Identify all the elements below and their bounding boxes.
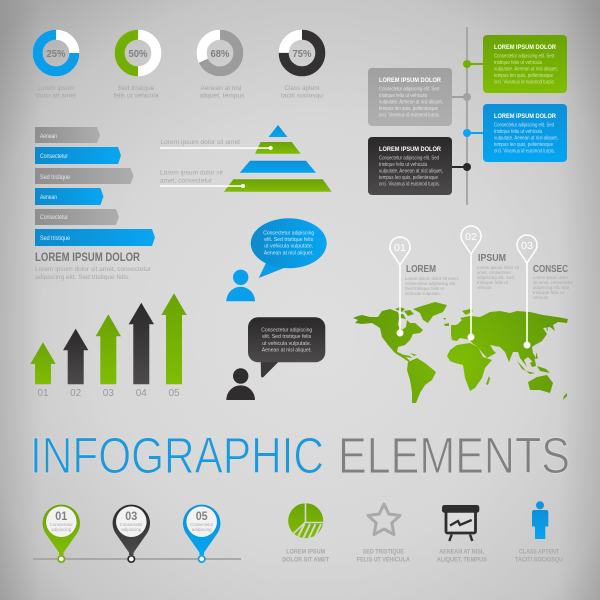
location pin 05: 05 [196, 511, 208, 523]
bubble: blue: elit. Sed tristique felis [264, 237, 314, 243]
icon: pie chart [282, 502, 329, 564]
icon: presentation board: AENEAN AT NISL [439, 548, 484, 556]
pyramid callout: lower [160, 170, 245, 188]
icon: blue person [226, 270, 255, 301]
donut: 75%: 75% [292, 49, 312, 60]
arrow 02: 02 [70, 388, 82, 399]
donut: 50%: 50% [128, 49, 148, 60]
map text: ipsum: tristique felis ut [477, 280, 509, 286]
map text: consec: sit amet, consectetur [533, 280, 573, 286]
location pin 05: adipiscing [192, 527, 212, 532]
map text: ipsum: amet, consectetur [477, 270, 511, 276]
map text: consec: adipiscing elit. Sed [533, 285, 569, 291]
donut: 68%: Aenean at nisl [200, 85, 242, 92]
title [30, 427, 570, 484]
arrow 03: 03 [103, 388, 114, 399]
location pin 01: 01 [55, 511, 68, 523]
icon: person: CLASS APTENT [519, 548, 559, 556]
timeline box: gray: Consectetur adipiscing elit. Sed [379, 86, 439, 92]
donut: 50% [114, 35, 159, 100]
icon: presentation board [437, 505, 487, 564]
title: INFOGRAPHIC [30, 427, 324, 484]
donut: 25%: Lorem ipsum [38, 85, 74, 92]
location pin 01: Consectetur [50, 522, 73, 527]
timeline box: gray: tempus leo quis, pellentesque [379, 106, 438, 112]
donut: 50%: felis ut vehicula [114, 92, 159, 100]
timeline box: dark: Consectetur adipiscing elit. Sed [379, 156, 439, 162]
icon: star: FELIS UT VEHICULA [357, 556, 410, 564]
timeline box: blue [463, 104, 567, 162]
pin 03: 03 [521, 241, 533, 252]
timeline box: green: orci. Vivamus id euismod turpis. [494, 80, 555, 86]
pin 02 [461, 226, 481, 340]
timeline box: blue: LOREM IPSUM DOLOR [494, 113, 556, 120]
timeline box: dark: LOREM IPSUM DOLOR [379, 146, 441, 153]
timeline box: blue: tempus leo quis, pellentesque [494, 142, 553, 148]
timeline box: green: vulputate. Aenean at nisl aliquet, [494, 66, 558, 72]
timeline box: green: tristique felis ut vehicula [494, 60, 542, 66]
world map [353, 302, 568, 403]
map text: consec: vehicula [533, 295, 548, 301]
map text: lorem: consectetur adipiscing elit. [405, 281, 456, 287]
pyramid callout: lower: amet, consectetur [160, 178, 213, 184]
map text: consec: tristique felis ut [533, 290, 565, 296]
tab: Sed tristique: Sed tristique [40, 236, 71, 242]
timeline box: gray: orci. Vivamus id euismod turpis. [379, 112, 440, 118]
map text: ipsum: IPSUM [478, 253, 506, 264]
arrow 03 [96, 314, 121, 399]
bubble: blue: Consectetur adipiscing [263, 230, 314, 236]
pin 02: 02 [465, 232, 477, 243]
icon: pie chart: DOLOR SIT AMET [282, 556, 329, 564]
location pin 05: Consectetur [190, 522, 214, 527]
dark speech bubble with person [226, 317, 325, 400]
arrow 01 [30, 342, 56, 399]
icon: person [515, 501, 563, 564]
location pin 03: adipiscing [121, 527, 142, 532]
map text: consec: CONSEC [533, 264, 568, 275]
map text: ipsum: vehicula [477, 285, 491, 291]
arrow 05: 05 [168, 388, 180, 399]
donut charts row [36, 35, 323, 100]
pin 03 [517, 235, 537, 348]
bubble: dark: ut vehicula vulputate. [262, 341, 311, 347]
timeline box: gray: vulputate. Aenean at nisl aliquet, [379, 100, 443, 106]
arrow 05 [161, 293, 187, 399]
pyramid callout: upper [160, 139, 273, 150]
timeline box: dark: tristique felis ut vehicula [379, 162, 427, 168]
timeline box: dark: vulputate. Aenean at nisl aliquet, [379, 168, 443, 174]
location pin 05 [183, 505, 220, 562]
map text: ipsum: adipiscing elit. Sed [477, 275, 514, 281]
location pin 03: 03 [125, 511, 137, 523]
map text: ipsum [477, 253, 520, 291]
timeline box: blue: vulputate. Aenean at nisl aliquet, [494, 136, 558, 142]
timeline box: blue: tristique felis ut vehicula [494, 129, 542, 135]
arrow 02 [63, 329, 88, 399]
donut: 25% [36, 35, 76, 100]
text block: lorem ipsum dolor: Lorem ipsum dolor sit amet, consectetur [35, 266, 152, 273]
map text: lorem: LOREM [406, 264, 436, 275]
bubble: dark: elit. Sed tristique felis [262, 334, 312, 340]
map pins [390, 226, 573, 348]
tab bars list [35, 127, 155, 246]
location pin 03: Consectetur [120, 522, 143, 527]
icon: star [357, 504, 410, 564]
timeline box: dark: orci. Vivamus id euismod turpis. [379, 182, 440, 188]
icon: dark person [226, 368, 255, 400]
text block: lorem ipsum dolor: adipiscing elit. Sed tristique felis. [35, 274, 130, 281]
pyramid chart [160, 125, 332, 192]
icon: presentation board: ALIQUET, TEMPUS [437, 556, 487, 564]
bubble: dark: Consectetur adipiscing [261, 328, 312, 334]
bubble: blue [251, 218, 327, 278]
tab: Aenean: Aenean [40, 195, 57, 201]
location pin 03 [113, 505, 150, 562]
text block: lorem ipsum dolor: LOREM IPSUM DOLOR [35, 252, 141, 264]
bubble: blue: Aenean at nisl aliquet. [264, 250, 314, 256]
map text: consec [533, 264, 573, 301]
donut: 68% [200, 35, 245, 100]
tab: Consectetur: Consectetur [40, 215, 68, 221]
donut: 25%: 25% [46, 49, 66, 60]
map text: lorem: Sed tristique felis ut [405, 286, 445, 292]
timeline box: green: Consectetur adipiscing elit. Sed [494, 54, 554, 60]
blue speech bubble with person [226, 218, 327, 301]
pin 01 [390, 237, 410, 336]
bubble: blue: ut vehicula vulputate. [264, 244, 313, 250]
location pins timeline [33, 505, 241, 562]
arrow bar chart [30, 293, 187, 399]
timeline box: gray: LOREM IPSUM DOLOR [379, 77, 441, 84]
timeline box: green: tempus leo quis, pellentesque [494, 73, 553, 79]
arrow 04: 04 [136, 388, 147, 399]
timeline box: dark [368, 137, 471, 195]
map text: lorem: vehicula vulputate. [405, 291, 441, 297]
donut: 75% [281, 35, 323, 100]
donut: 50%: Sed tristique [118, 85, 155, 92]
donut: 68%: 68% [210, 49, 230, 60]
timeline with text boxes [368, 27, 567, 205]
bottom icons row [282, 501, 563, 564]
pyramid callout: upper: Lorem ipsum dolor sit amet [160, 139, 240, 146]
bubble: dark: Aenean at nisl aliquet. [262, 348, 312, 354]
tab: Sed tristique: Sed tristique [40, 175, 71, 181]
pin 01: 01 [394, 243, 406, 254]
timeline box: green [463, 35, 567, 93]
location pin 01: adipiscing [51, 527, 72, 532]
map text: lorem: Lorem ipsum dolor sit amet, [405, 276, 459, 282]
location pin 01 [43, 505, 80, 562]
pyramid callout: lower: Lorem ipsum dolor sit [160, 170, 223, 177]
map text: ipsum: Lorem ipsum dolor sit [477, 265, 520, 271]
icon: star: SED TRISTIQUE [363, 548, 404, 556]
icon: pie chart: LOREM IPSUM [286, 548, 325, 556]
donut: 75%: taciti sociosqu [281, 92, 323, 100]
icon: person: TACITI SOCIOSQU [515, 556, 563, 564]
bubble: dark [248, 317, 325, 378]
map text: lorem [405, 264, 459, 297]
donut: 68%: aliquet, tempus [200, 92, 245, 100]
donut: 75%: Class aptent [284, 85, 320, 92]
map text: consec: Lorem ipsum dolor [533, 275, 568, 281]
arrow 01: 01 [37, 388, 49, 399]
arrow 04 [129, 303, 154, 399]
text block: lorem ipsum dolor [35, 252, 152, 281]
donut: 25%: dolor sit amet [36, 92, 76, 100]
timeline box: blue: orci. Vivamus id euismod turpis. [494, 148, 555, 154]
timeline box: green: LOREM IPSUM DOLOR [494, 44, 556, 51]
timeline box: gray [368, 68, 471, 126]
timeline box: gray: tristique felis ut vehicula [379, 93, 427, 99]
timeline box: dark: tempus leo quis, pellentesque [379, 175, 438, 181]
tab: Consectetur: Consectetur [40, 154, 68, 160]
tab: Aenean: Aenean [40, 134, 57, 140]
timeline box: blue: Consectetur adipiscing elit. Sed [494, 122, 554, 128]
